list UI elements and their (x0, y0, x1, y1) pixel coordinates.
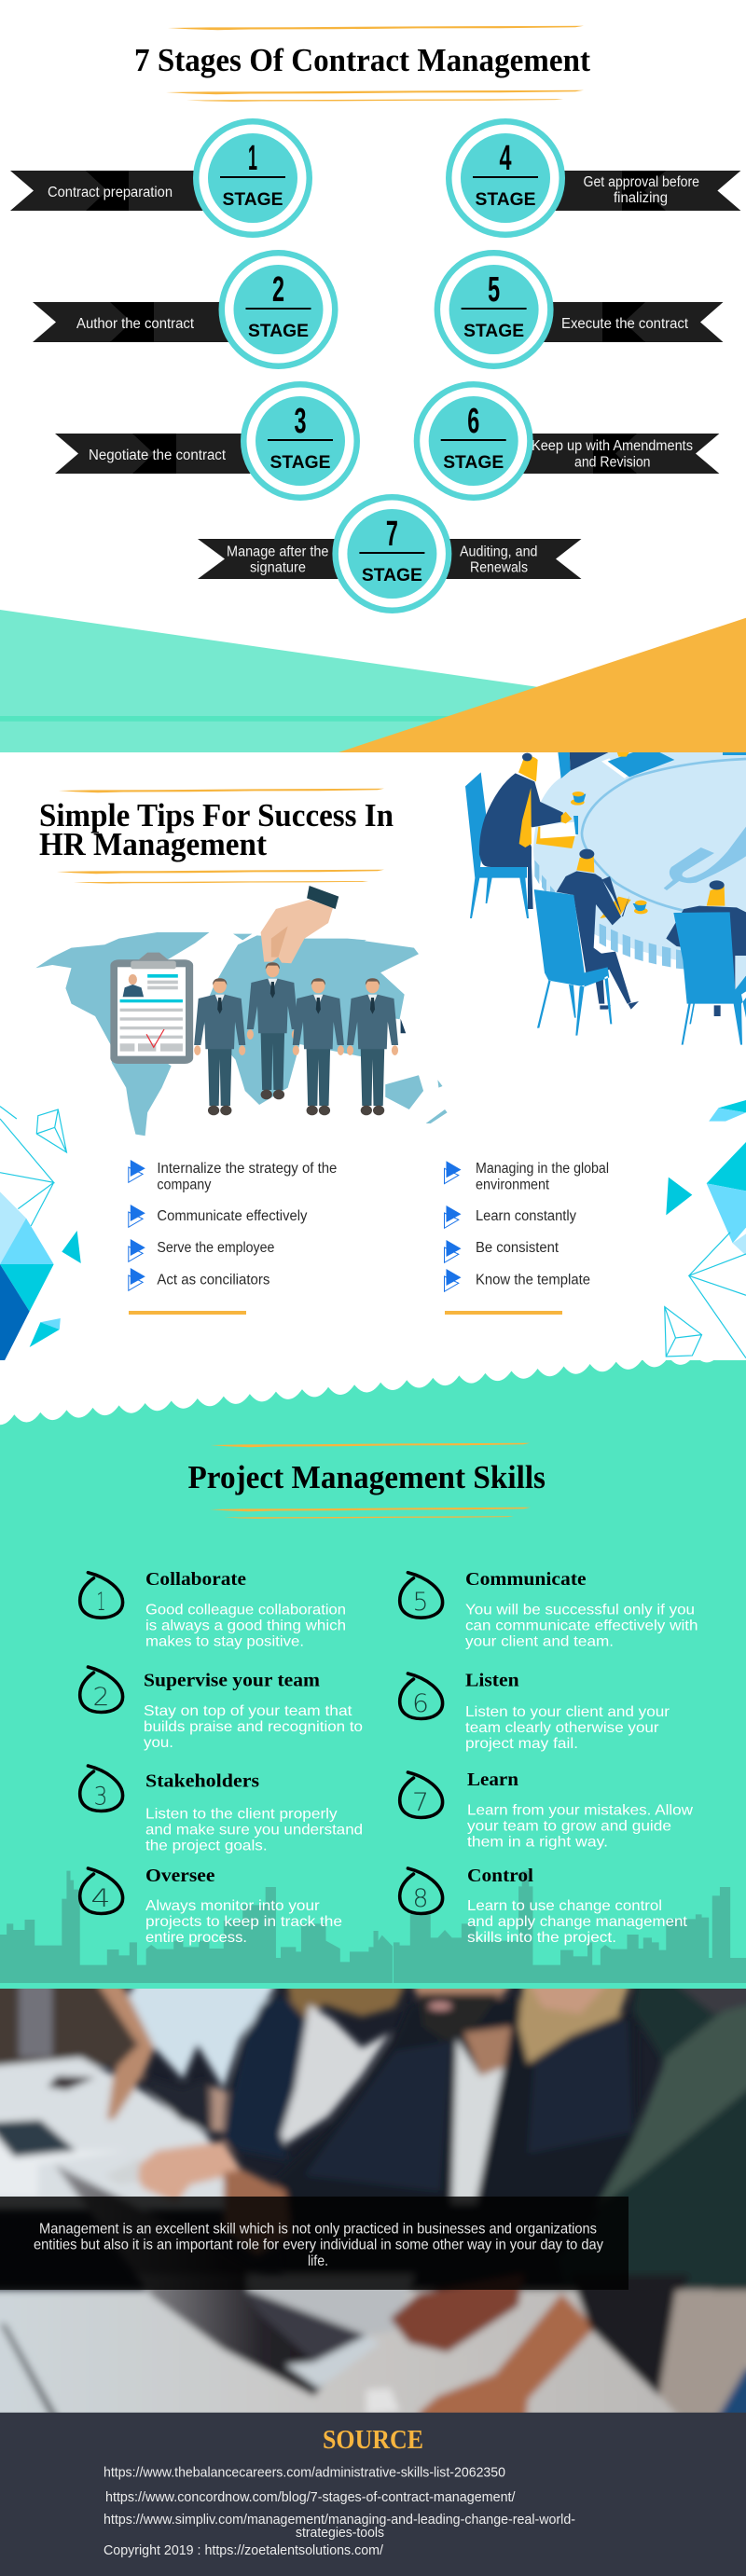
skill 1: collaborate: is always a good thing which (145, 1619, 346, 1634)
list: HR tips right column: Managing in the global (476, 1161, 609, 1177)
skill 4: oversee: entire process. (145, 1930, 247, 1946)
stage 5: execute the contract: Execute the contract (561, 316, 689, 332)
stage 5: execute the contract (435, 250, 724, 369)
seated person left (465, 753, 578, 918)
skill 1: collaborate: 1 (97, 1588, 106, 1617)
panel: project management skills background (0, 653, 746, 1989)
source links: https://www.thebalancecareers.com/administrative-skills-list-2062350 (104, 2465, 505, 2481)
skill 5: communicate: can communicate effectively with (465, 1619, 698, 1634)
stage 5: execute the contract: 5 (488, 269, 500, 309)
hand picking a candidate (261, 886, 338, 963)
source links: https://www.simpliv.com/management/managing-and-leading-change-real-world- (104, 2512, 575, 2528)
skill 6: listen: 6 (412, 1689, 429, 1718)
stage 7: manage after the signature, auditing and renewals: STAGE (362, 565, 422, 585)
skill 2: supervise your team: 2 (93, 1683, 110, 1712)
list: HR tips right column (444, 1161, 609, 1315)
skill 8: control (400, 1866, 688, 1946)
skill 3: stakeholders: the project goals. (145, 1839, 268, 1854)
stage 7: manage after the signature, auditing and renewals: 7 (386, 514, 398, 553)
list: HR tips right column: Be consistent (476, 1240, 560, 1256)
clipboard resume (110, 953, 193, 1064)
skill 5: communicate: your client and team. (465, 1634, 614, 1650)
skill 8: control: and apply change management (467, 1914, 688, 1930)
heading: simple tips for success in HR management (39, 789, 394, 884)
source heading: SOURCE (323, 2425, 423, 2455)
source links: Copyright 2019 : https://zoetalentsolutions.com/ (104, 2542, 384, 2558)
stage 7: manage after the signature, auditing and renewals: Auditing, and (460, 544, 537, 560)
stage 3: negotiate the contract (55, 381, 360, 501)
skill 8: control: skills into the project. (467, 1930, 616, 1946)
skill 7: learn: 7 (412, 1788, 429, 1817)
stage 2: author the contract: STAGE (248, 321, 309, 341)
skill 2: supervise your team: Stay on top of your team that (144, 1703, 352, 1719)
skill 8: control: 8 (412, 1884, 429, 1913)
illustration: meeting around a table (465, 752, 746, 1045)
stage 7: manage after the signature, auditing and renewals: Renewals (470, 559, 528, 576)
skill 1: collaborate (80, 1569, 346, 1650)
skill 8: control: Control (467, 1866, 533, 1886)
skill 6: listen: Listen to your client and your (465, 1704, 670, 1720)
skill 2: supervise your team: Supervise your team (144, 1671, 320, 1691)
heading: 7 Stages Of Contract Management (134, 26, 590, 102)
skill 7: learn: Learn from your mistakes. Allow (467, 1803, 693, 1819)
list: HR tips left column: company (157, 1177, 212, 1192)
skill 3: stakeholders: Stakeholders (145, 1771, 259, 1792)
stage 1: contract preparation (10, 118, 312, 238)
stage 4: get approval before finalizing: Get approval before (584, 174, 699, 190)
skill 8: control: Learn to use change control (467, 1898, 662, 1914)
stage 3: negotiate the contract: Negotiate the contract (89, 448, 227, 463)
stage 2: author the contract (33, 250, 338, 369)
decoration: right crystal shapes (665, 1100, 746, 1358)
world map (35, 932, 448, 1136)
photo: team working around a laptop (0, 1977, 746, 2424)
panel: source footer (0, 2413, 746, 2576)
stage 2: author the contract: Author the contract (76, 316, 195, 332)
skill 6: listen (400, 1671, 670, 1752)
list: HR tips left column (129, 1160, 337, 1315)
skill 4: oversee: projects to keep in track the (145, 1914, 342, 1930)
seated person right (666, 880, 746, 1045)
stage 7: manage after the signature, auditing and renewals (198, 494, 582, 613)
skill 2: supervise your team (80, 1667, 363, 1751)
skill 4: oversee: 4 (91, 1884, 110, 1913)
stage 6: keep up with amendments and revision: 6 (467, 401, 479, 440)
skill 5: communicate: 5 (412, 1588, 429, 1617)
stage 5: execute the contract: STAGE (463, 321, 524, 341)
source links (104, 2465, 575, 2558)
stage 6: keep up with amendments and revision: and Revision (574, 455, 651, 471)
stage 6: keep up with amendments and revision: STAGE (443, 452, 504, 473)
skill 7: learn: your team to grow and guide (467, 1819, 671, 1835)
stage 6: keep up with amendments and revision: Keep up with Amendments (532, 438, 693, 454)
caption box: entities but also it is an important role for every individual in some other way in your day to day (34, 2238, 603, 2253)
stage 3: negotiate the contract: 3 (295, 401, 306, 440)
stage 1: contract preparation: STAGE (222, 189, 283, 210)
list: HR tips left column: Serve the employee (157, 1240, 274, 1256)
heading: project management skills (188, 1443, 546, 1519)
city skyline (0, 1871, 746, 1983)
skill 1: collaborate: Good colleague collaboration (145, 1603, 346, 1619)
source links: strategies-tools (296, 2525, 384, 2541)
stage 4: get approval before finalizing: finalizing (614, 190, 668, 206)
list: HR tips left column: Internalize the strategy of the (157, 1161, 337, 1177)
skill 3: stakeholders: Listen to the client properly (145, 1807, 338, 1823)
skill 7: learn: Learn (467, 1770, 518, 1790)
coffee cups (571, 792, 648, 914)
stage 3: negotiate the contract: STAGE (270, 452, 330, 473)
skill 1: collaborate: makes to stay positive. (145, 1634, 304, 1650)
stage 4: get approval before finalizing: 4 (500, 138, 512, 177)
illustration: world map with recruiter hand, clipboard and candidates (35, 886, 448, 1136)
list: HR tips right column: Know the template (476, 1272, 590, 1288)
background wedges: mint and orange (0, 610, 746, 752)
skill 2: supervise your team: you. (144, 1735, 173, 1751)
stage 4: get approval before finalizing (446, 118, 740, 238)
stage 6: keep up with amendments and revision (414, 381, 719, 501)
heading: simple tips for success in HR management: Simple Tips For Success In (39, 797, 394, 833)
skill 4: oversee: Oversee (145, 1866, 215, 1886)
skill 2: supervise your team: builds praise and recognition to (144, 1719, 363, 1735)
stage 2: author the contract: 2 (272, 269, 284, 309)
candidates in suits (194, 962, 406, 1115)
stage 4: get approval before finalizing: STAGE (476, 189, 535, 210)
list: HR tips right column: Learn constantly (476, 1208, 576, 1224)
stage 7: manage after the signature, auditing and renewals: signature (250, 559, 306, 576)
heading: 7 Stages Of Contract Management: 7 Stages Of Contract Management (134, 42, 590, 78)
stage 1: contract preparation: Contract preparation (48, 185, 173, 200)
heading: simple tips for success in HR management: HR Management (39, 826, 267, 862)
list: HR tips left column: Act as conciliators (157, 1272, 270, 1288)
skill 1: collaborate: Collaborate (145, 1569, 246, 1590)
skill 4: oversee (80, 1866, 342, 1946)
skill 3: stakeholders (80, 1766, 363, 1854)
skill 5: communicate: You will be successful only if you (465, 1603, 695, 1619)
list: HR tips left column: Communicate effectively (157, 1208, 308, 1224)
heading: project management skills: Project Management Skills (188, 1459, 546, 1495)
skill 4: oversee: Always monitor into your (145, 1898, 320, 1914)
seated person centre (534, 849, 639, 1036)
skill 5: communicate: Communicate (465, 1569, 587, 1590)
caption box: Management is an excellent skill which is not only practiced in businesses and organizations (39, 2222, 597, 2238)
skill 6: listen: Listen (465, 1671, 519, 1691)
skill 7: learn: them in a right way. (467, 1835, 608, 1851)
decoration: left crystal shapes (0, 1107, 81, 1360)
skill 6: listen: project may fail. (465, 1736, 578, 1752)
skill 7: learn (400, 1770, 693, 1851)
stage 7: manage after the signature, auditing and renewals: Manage after the (227, 544, 328, 560)
skill 5: communicate (400, 1569, 698, 1650)
source links: https://www.concordnow.com/blog/7-stages-of-contract-management/ (105, 2489, 516, 2505)
stage 1: contract preparation: 1 (248, 138, 257, 177)
skill 3: stakeholders: 3 (93, 1783, 108, 1811)
skill 3: stakeholders: and make sure you understand (145, 1823, 363, 1839)
caption box (0, 2197, 629, 2290)
list: HR tips right column: environment (476, 1177, 550, 1192)
caption box: life. (308, 2253, 328, 2269)
skill 6: listen: team clearly otherwise your (465, 1720, 659, 1736)
